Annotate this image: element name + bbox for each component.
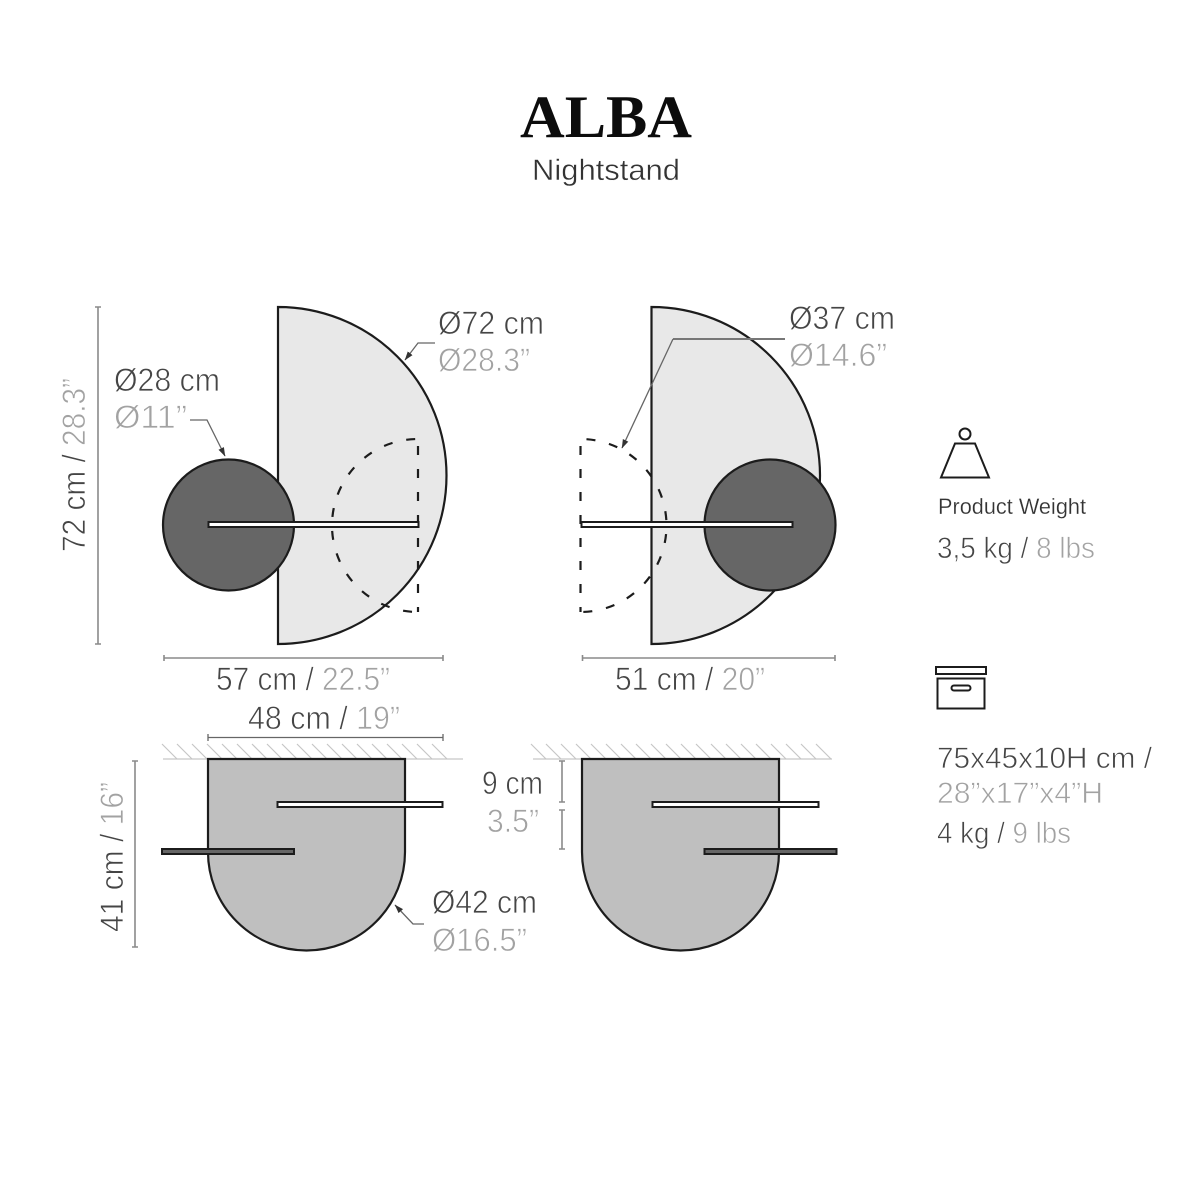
text: package details: 28”x17”x4”H xyxy=(937,777,1103,810)
drawing: front view left xyxy=(163,307,447,644)
callout: diameter 28 cm xyxy=(114,362,225,456)
callout: diameter 37 cm: Ø37 cm xyxy=(789,300,895,336)
subtitle: Nightstand xyxy=(532,154,680,187)
callout: diameter 72 cm xyxy=(405,305,544,378)
callout: diameter 42 cm: Ø42 cm xyxy=(432,884,537,920)
title: ALBA xyxy=(520,84,692,150)
dimension: width 57 cm label: 57 cm / 22.5” xyxy=(216,661,390,697)
dimension: gap 9 cm label: 3.5” xyxy=(487,803,539,839)
icon: box xyxy=(936,667,986,708)
wall hatch left xyxy=(162,744,463,759)
dimension: width 48 cm line xyxy=(208,734,443,741)
callout: diameter 42 cm xyxy=(395,884,537,958)
dimension: height 72 cm line xyxy=(95,307,101,644)
dimension: gap 9 cm label: 9 cm xyxy=(482,765,543,801)
callout: diameter 42 cm: Ø16.5” xyxy=(432,922,527,958)
drawing: front view right xyxy=(580,307,836,644)
dimension: height 72 cm label: 72 cm / 28.3” xyxy=(56,378,92,552)
label: product weight: Product Weight xyxy=(938,494,1086,519)
dimension: width 48 cm label: 48 cm / 19” xyxy=(248,700,400,736)
text: package details xyxy=(937,742,1153,850)
dimension: height 41 cm line xyxy=(132,761,138,947)
callout: diameter 28 cm: Ø28 cm xyxy=(114,362,220,398)
dimension: height 41 cm label: 41 cm / 16” xyxy=(94,782,130,932)
drawing: side view left xyxy=(162,759,442,950)
dimension: width 51 cm label: 51 cm / 20” xyxy=(615,661,765,697)
drawing: side view right xyxy=(582,759,836,950)
callout: diameter 72 cm: Ø28.3” xyxy=(438,342,530,378)
text: package details: 75x45x10H cm / xyxy=(937,742,1153,775)
value: product weight: 3,5 kg / 8 lbs xyxy=(937,532,1095,565)
dimension: gap 9 cm label xyxy=(482,765,543,839)
dimension: width 57 cm line xyxy=(164,655,443,661)
callout: diameter 37 cm: Ø14.6” xyxy=(789,337,887,373)
callout: diameter 37 cm xyxy=(622,300,895,448)
text: package details: 4 kg / 9 lbs xyxy=(937,817,1071,850)
wall hatch right xyxy=(531,744,832,759)
dimension: width 51 cm line xyxy=(582,655,835,661)
icon: weight xyxy=(941,428,989,478)
callout: diameter 72 cm: Ø72 cm xyxy=(438,305,544,341)
callout: diameter 28 cm: Ø11” xyxy=(114,399,187,435)
dimension: gap 9 cm lines xyxy=(559,761,565,849)
